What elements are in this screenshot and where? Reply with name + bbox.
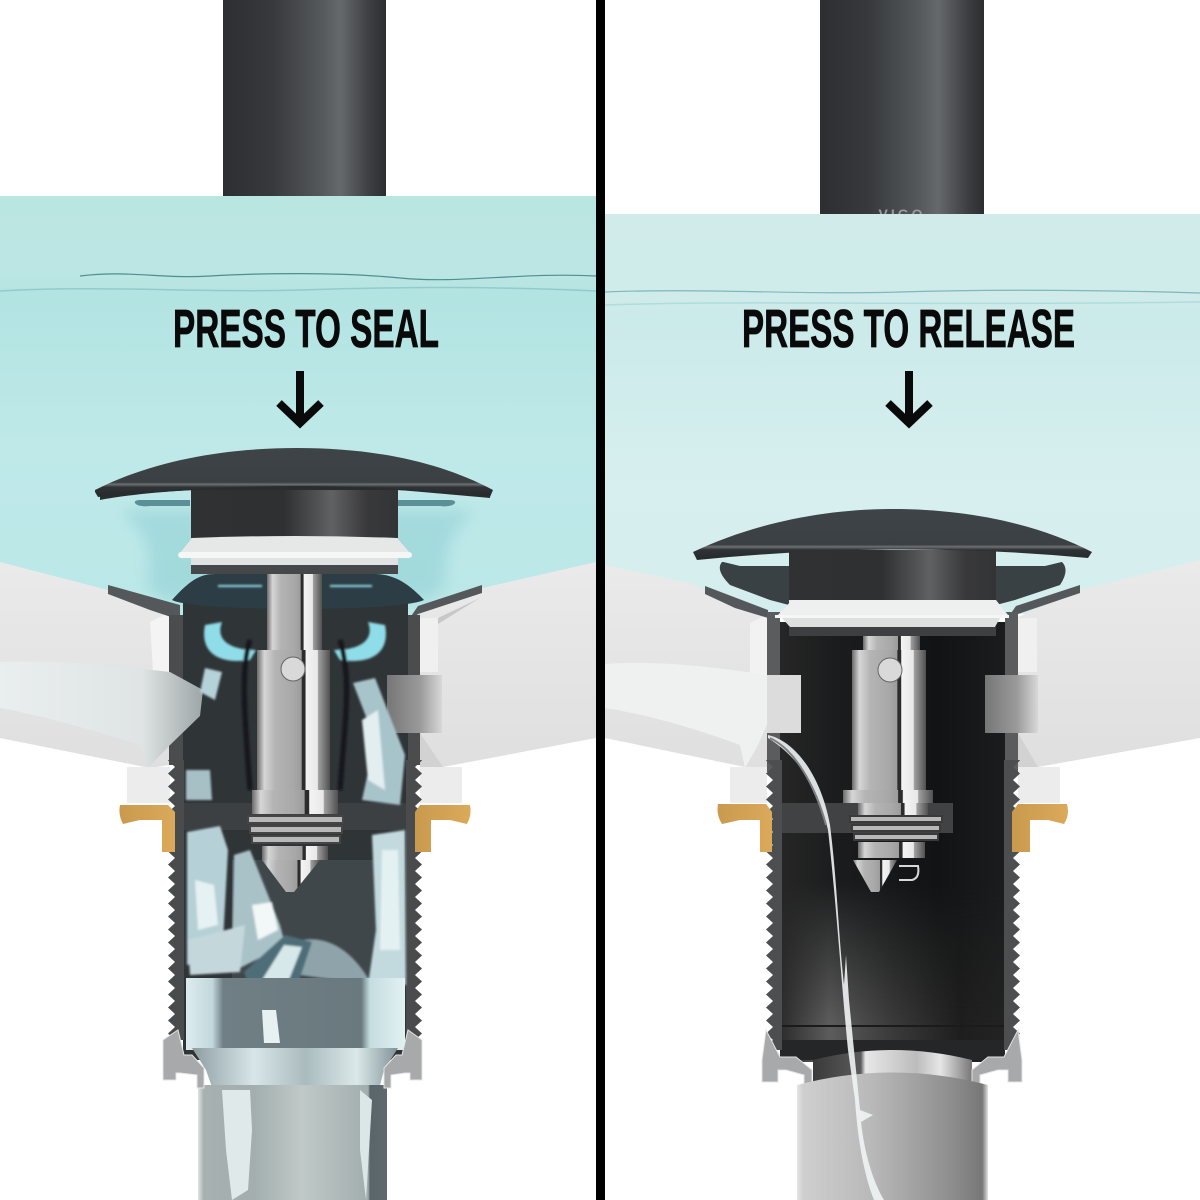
- drain body: left: [169, 574, 424, 1060]
- sleeves: right panel: [767, 675, 1038, 733]
- water swirls: left panel: [186, 586, 405, 805]
- stem assembly: left: [248, 574, 343, 892]
- faucet: right: [820, 0, 984, 214]
- water surface: left: [0, 274, 596, 291]
- threads: right panel: [766, 760, 1020, 1050]
- shadow ring under cap: right: [720, 562, 1066, 605]
- water: left basin: [0, 196, 596, 616]
- drain body: right: [767, 612, 1018, 1062]
- basin section: right side: [1005, 560, 1200, 803]
- stem assembly: right: [843, 636, 942, 892]
- faucet: left: [223, 0, 386, 196]
- basin section: right side: [405, 562, 596, 803]
- panel: press to seal: [0, 0, 596, 1200]
- silver ring and flange: right: [762, 1030, 1022, 1092]
- threads: left panel: [168, 760, 422, 1040]
- heading: press to seal: PRESS TO SEAL: [173, 299, 439, 359]
- basin section: left side: [605, 565, 768, 803]
- divider: [596, 0, 605, 1200]
- pipe: right: [797, 1072, 988, 1200]
- water stream: right: [768, 735, 884, 1200]
- lower glass: left drain: [186, 978, 405, 1093]
- water surface: right: [605, 290, 1200, 305]
- soft shadow below stopper: [120, 510, 475, 600]
- stopper: right: [693, 509, 1092, 636]
- sleeve and jet: left panel: [0, 662, 442, 768]
- arrow: down left: [279, 371, 321, 423]
- pipe: left: [198, 1085, 387, 1200]
- basin section: left side: [0, 562, 180, 803]
- stopper: left: [95, 448, 493, 574]
- water: right basin: [605, 214, 1200, 614]
- brass nuts: right panel: [718, 804, 1068, 852]
- panel: press to release: [605, 0, 1200, 1200]
- arrow: down right: [888, 371, 930, 423]
- brass nuts: left panel: [119, 805, 471, 852]
- flange: left panel: [163, 1030, 422, 1088]
- water mass: left drain: [187, 826, 406, 990]
- brand mark on faucet: VIGO: [878, 206, 926, 222]
